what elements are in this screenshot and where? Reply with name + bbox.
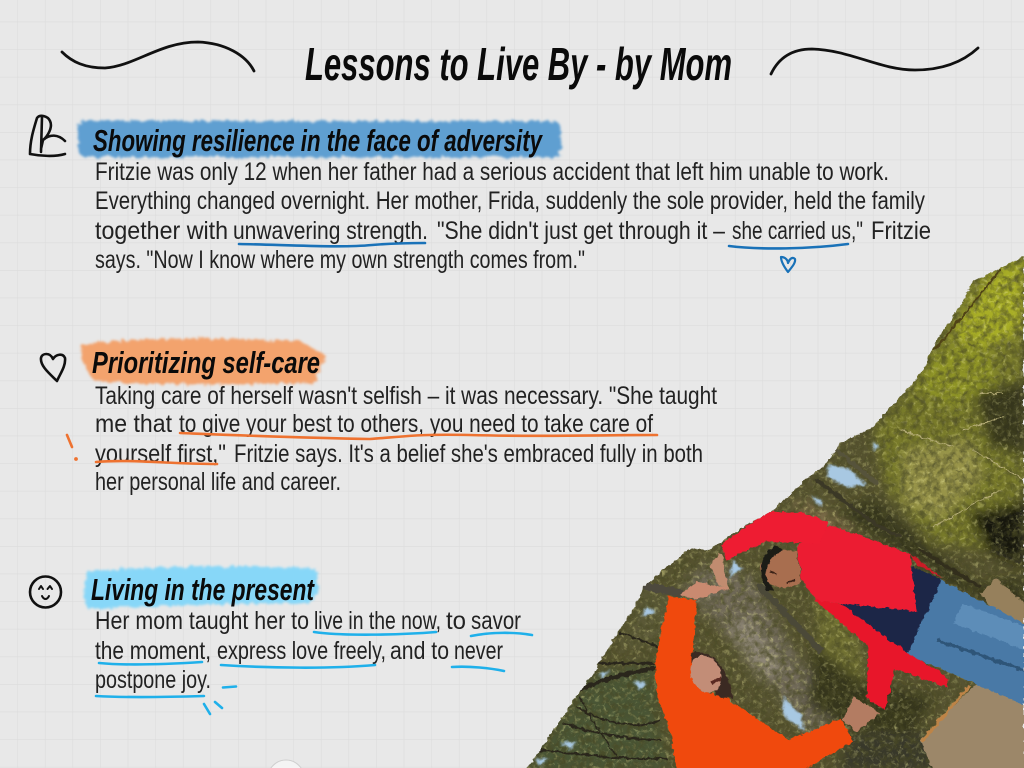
section: showing resilience — [30, 116, 931, 274]
photo texture: dark and yellow speckle — [520, 250, 1024, 768]
icon: heart outline — [41, 354, 65, 381]
icon: flexed arm — [30, 116, 65, 156]
heading highlight: blue brush — [78, 121, 561, 157]
body paragraph — [95, 158, 931, 274]
photo: daughter in red jacket — [710, 512, 1024, 732]
hair and face — [690, 652, 733, 698]
title with decorative swashes — [62, 38, 978, 90]
jacket body — [797, 525, 917, 612]
body paragraph: Fritzie — [871, 217, 931, 245]
heading: Showing resilience in the face of adversity — [93, 123, 543, 158]
hair and face — [760, 550, 802, 588]
body and arms — [655, 597, 853, 768]
body paragraph: and to — [390, 637, 449, 665]
body paragraph: yourself first," — [95, 440, 226, 468]
heading highlight: light blue brush — [84, 567, 318, 609]
body paragraph: Fritzie says. It's a belief she's embraced fully in both — [234, 440, 703, 468]
photo: mother and daughter forming a heart with their arms — [520, 250, 1024, 768]
raised arm — [722, 512, 828, 560]
body paragraph: never — [454, 637, 503, 665]
photo: mother in orange jacket — [655, 582, 853, 768]
body paragraph: live in the now, — [314, 607, 441, 635]
body paragraph: says. "Now I know where my own strength comes from." — [95, 246, 585, 274]
body paragraph — [95, 607, 521, 694]
section: prioritizing self-care — [41, 339, 717, 496]
body paragraph: Her mom taught her to — [95, 607, 309, 635]
decorative white circle at bottom edge — [268, 760, 304, 768]
orange underlines — [96, 433, 657, 464]
photo: gravel ground — [920, 683, 1024, 768]
body paragraph: her personal life and career. — [95, 468, 341, 496]
jacket tail and arm — [815, 600, 947, 710]
photo: sky patches — [535, 442, 879, 767]
body paragraph: together with — [95, 217, 228, 245]
body paragraph: to — [446, 607, 466, 635]
photo: tree branches and trunks — [540, 270, 1024, 759]
icon: smiling face — [30, 576, 61, 608]
navy top — [837, 567, 942, 655]
body paragraph: Taking care of herself wasn't selfish – it was necessary. "She taught — [95, 382, 717, 410]
raised hand — [680, 582, 728, 599]
body paragraph: unwavering strength. — [233, 217, 428, 245]
icon: small blue heart — [781, 257, 795, 272]
hands — [710, 552, 730, 591]
body paragraph: she carried us," — [732, 217, 863, 245]
title text: Lessons to Live By - by Mom — [305, 38, 732, 90]
photo: bag near the right edge — [980, 578, 1024, 627]
right swash — [771, 48, 978, 74]
body paragraph: express love freely, — [217, 637, 386, 665]
section: living in the present — [30, 567, 532, 714]
jeans — [903, 580, 1024, 705]
blue underlines — [239, 243, 848, 248]
body paragraph: Fritzie was only 12 when her father had a serious accident that left him unable to work. — [95, 158, 889, 186]
heading: Prioritizing self-care — [92, 345, 320, 380]
body paragraph: "She didn't just get through it – — [437, 217, 725, 245]
heading highlight: orange brush — [82, 339, 326, 384]
body paragraph: postpone joy. — [95, 666, 211, 694]
left swash — [62, 42, 254, 71]
body paragraph: to give your best to others, you need to take care of — [179, 410, 653, 438]
body paragraph — [95, 382, 717, 496]
orange exclamation mark — [67, 435, 77, 460]
body paragraph: the moment, — [95, 637, 211, 665]
body paragraph: me that — [95, 410, 172, 438]
light blue underlines and sparkle strokes — [96, 632, 532, 714]
body paragraph: savor — [471, 607, 521, 635]
photo background: forest — [520, 250, 1024, 768]
heading: Living in the present — [91, 572, 315, 607]
